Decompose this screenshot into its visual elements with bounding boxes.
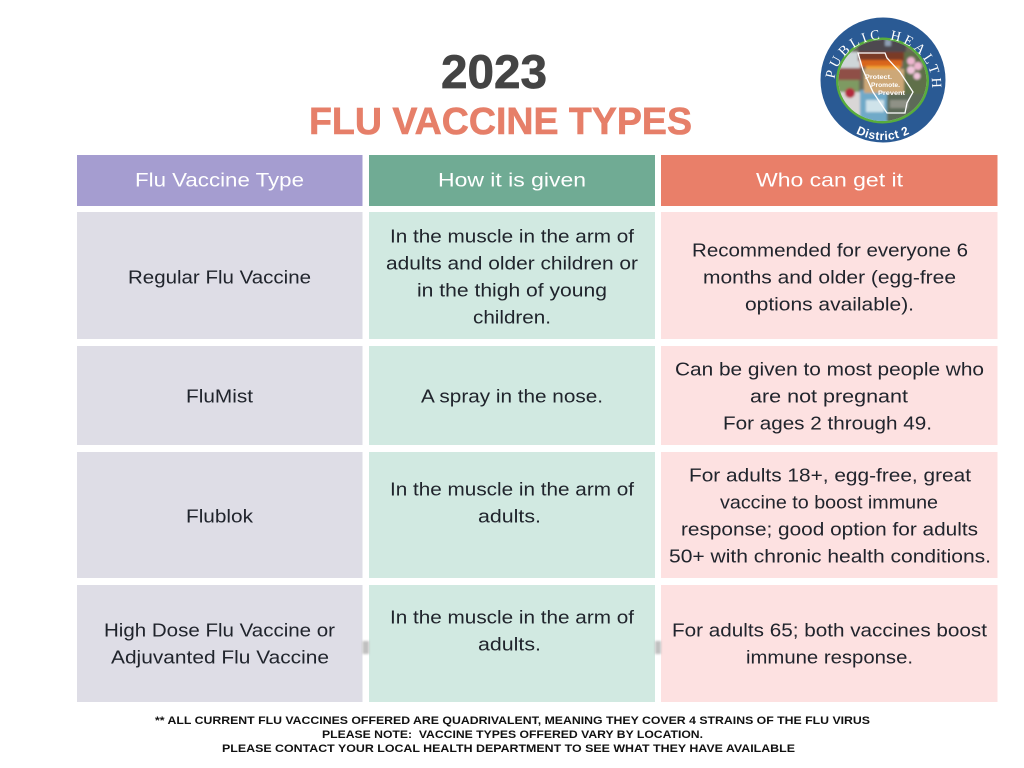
cell: vaccine type [77,212,362,339]
header: flu vaccine type [77,155,362,206]
cell: who can get it: For adults 18+, egg-free, great [689,464,971,486]
cell: vaccine type [77,346,362,445]
cell: vaccine type: Regular Flu Vaccine [128,266,311,288]
cell: how it is given [369,452,655,578]
header: how it is given [369,155,655,206]
header: how it is given: How it is given [438,170,586,192]
cell: how it is given [369,585,655,702]
cell: who can get it: Recommended for everyone 6 [692,240,968,260]
cell: who can get it [661,346,998,445]
cell: who can get it [661,452,998,578]
cell: how it is given: In the muscle in the arm of [390,606,635,628]
cell: vaccine type: Adjuvanted Flu Vaccine [111,646,329,668]
cell: vaccine type [77,452,362,578]
cell: who can get it: For ages 2 through 49. [723,412,932,434]
panel: high dose row [77,585,998,702]
cell: how it is given: adults. [478,506,541,526]
cell: how it is given: adults and older children or [386,252,638,274]
logo: Public Health District 2 seal: Prevent [878,90,906,97]
panel: flumist row [77,346,998,445]
cell: who can get it: Can be given to most people who [675,358,984,380]
cell: how it is given [369,346,655,445]
cell: who can get it [661,585,998,702]
cell: who can get it: months and older (egg-free [703,266,956,288]
panel: regular flu vaccine row [77,212,998,339]
header: who can get it [661,155,998,206]
footnote: ** ALL CURRENT FLU VACCINES OFFERED ARE QUADRIVALENT, MEANING THEY COVER 4 STRAINS OF THE FLU VIRUS [155,715,870,727]
panel: table header row [77,155,998,206]
logo: Public Health District 2 seal: District 2 [856,126,910,140]
title: year: 2023 [441,45,547,98]
cell: who can get it: 50+ with chronic health conditions. [669,546,991,566]
footnote: PLEASE NOTE: VACCINE TYPES OFFERED VARY BY LOCATION. [322,729,703,741]
cell: who can get it: options available). [745,294,914,314]
cell: who can get it: response; good option for adults [681,518,978,540]
cell: vaccine type: Flublok [186,506,254,526]
cell: how it is given: adults. [478,634,541,654]
cell: vaccine type: High Dose Flu Vaccine or [104,620,335,640]
footnote [155,715,870,755]
cell: how it is given: In the muscle in the arm of [390,226,635,246]
header: who can get it: Who can get it [756,170,904,192]
cell: who can get it: are not pregnant [750,386,908,406]
cell: who can get it: immune response. [746,646,913,668]
cell: vaccine type: FluMist [186,386,253,406]
cell: how it is given: children. [473,306,551,328]
panel: flublok row [77,452,998,578]
logo: Public Health District 2 seal: Promote. [871,82,900,89]
footnote: PLEASE CONTACT YOUR LOCAL HEALTH DEPARTMENT TO SEE WHAT THEY HAVE AVAILABLE [222,743,795,755]
header: flu vaccine type: Flu Vaccine Type [135,170,304,192]
logo: Public Health District 2 seal: Protect. [865,74,892,81]
logo: Public Health District 2 seal [820,18,946,142]
cell: who can get it: vaccine to boost immune [720,492,938,512]
cell: how it is given: A spray in the nose. [421,386,603,406]
title: flu vaccine types: FLU VACCINE TYPES [309,101,692,143]
cell: how it is given: in the thigh of young [417,280,607,300]
cell: vaccine type [77,585,362,702]
cell: how it is given [369,212,655,339]
cell: how it is given: In the muscle in the arm of [390,478,635,500]
cell: who can get it: For adults 65; both vaccines boost [672,620,987,640]
logo: Public Health District 2 seal: PUBLIC HEALTH [825,30,942,88]
cell: who can get it [661,212,998,339]
